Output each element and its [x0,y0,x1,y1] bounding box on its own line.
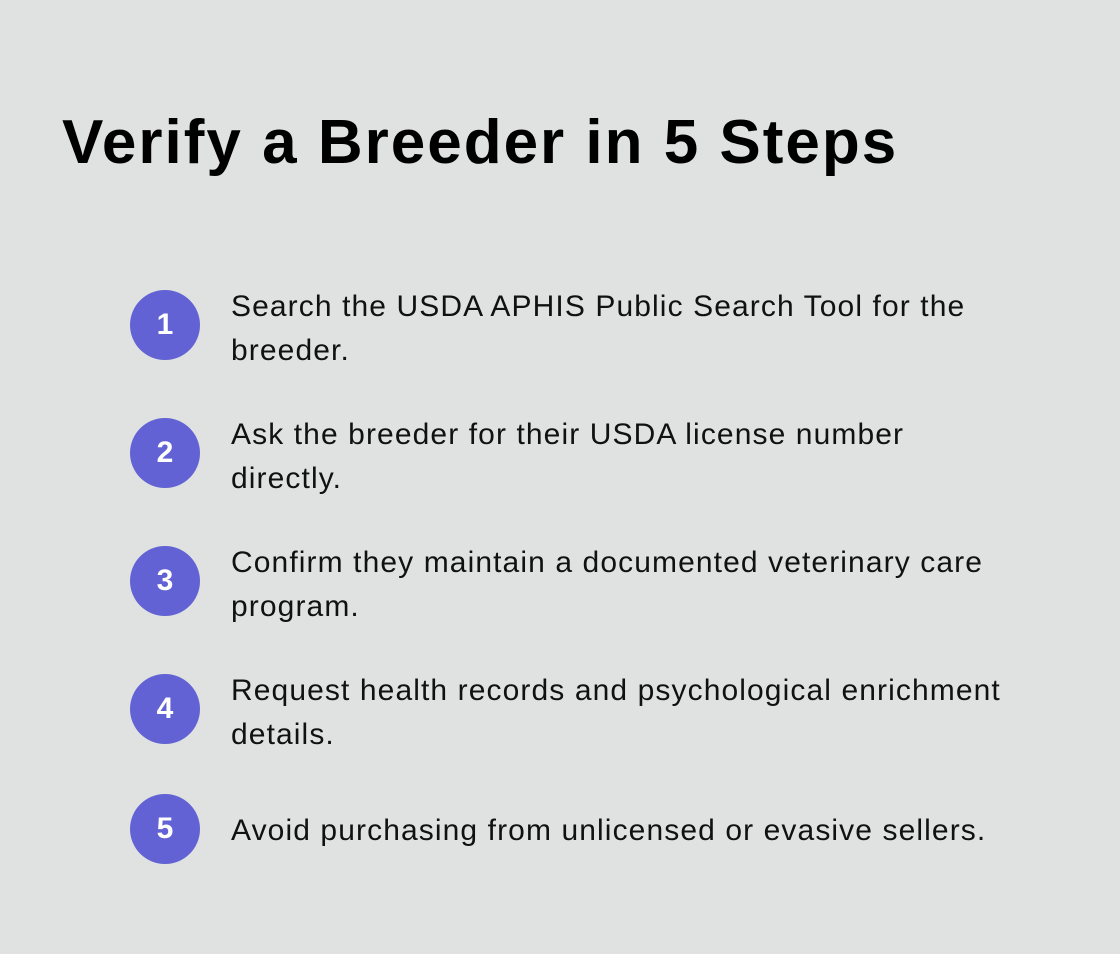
icon: number 2 [130,418,200,488]
text 5: Avoid purchasing from unlicensed or evasive sellers. [231,814,986,847]
icon: number 1 [130,290,200,360]
icon: number 4 [130,674,200,744]
text 2: directly. [231,462,342,495]
text 1: Search the USDA APHIS Public Search Tool for the [231,290,965,323]
text 4: Request health records and psychological enrichment [231,674,1001,707]
icon: number 3 [130,546,200,616]
text 3: Confirm they maintain a documented veterinary care [231,546,983,579]
step 5 [130,794,986,864]
text 2 [231,418,904,495]
text 3: program. [231,590,360,623]
step 2 [130,418,904,495]
icon: number 1: 1 [157,308,173,341]
text 1: breeder. [231,334,350,367]
title: Verify a Breeder in 5 Steps [62,108,898,177]
icon: number 2: 2 [157,436,173,469]
icon: number 5: 5 [157,812,173,845]
icon: number 3: 3 [157,564,173,597]
text 2: Ask the breeder for their USDA license number [231,418,904,451]
icon: number 4: 4 [157,692,173,725]
step 3 [130,546,983,623]
text 4: details. [231,718,335,751]
text 4 [231,674,1001,751]
text 3 [231,546,983,623]
text 1 [231,290,965,367]
step 4 [130,674,1001,751]
icon: number 5 [130,794,200,864]
step 1 [130,290,965,367]
